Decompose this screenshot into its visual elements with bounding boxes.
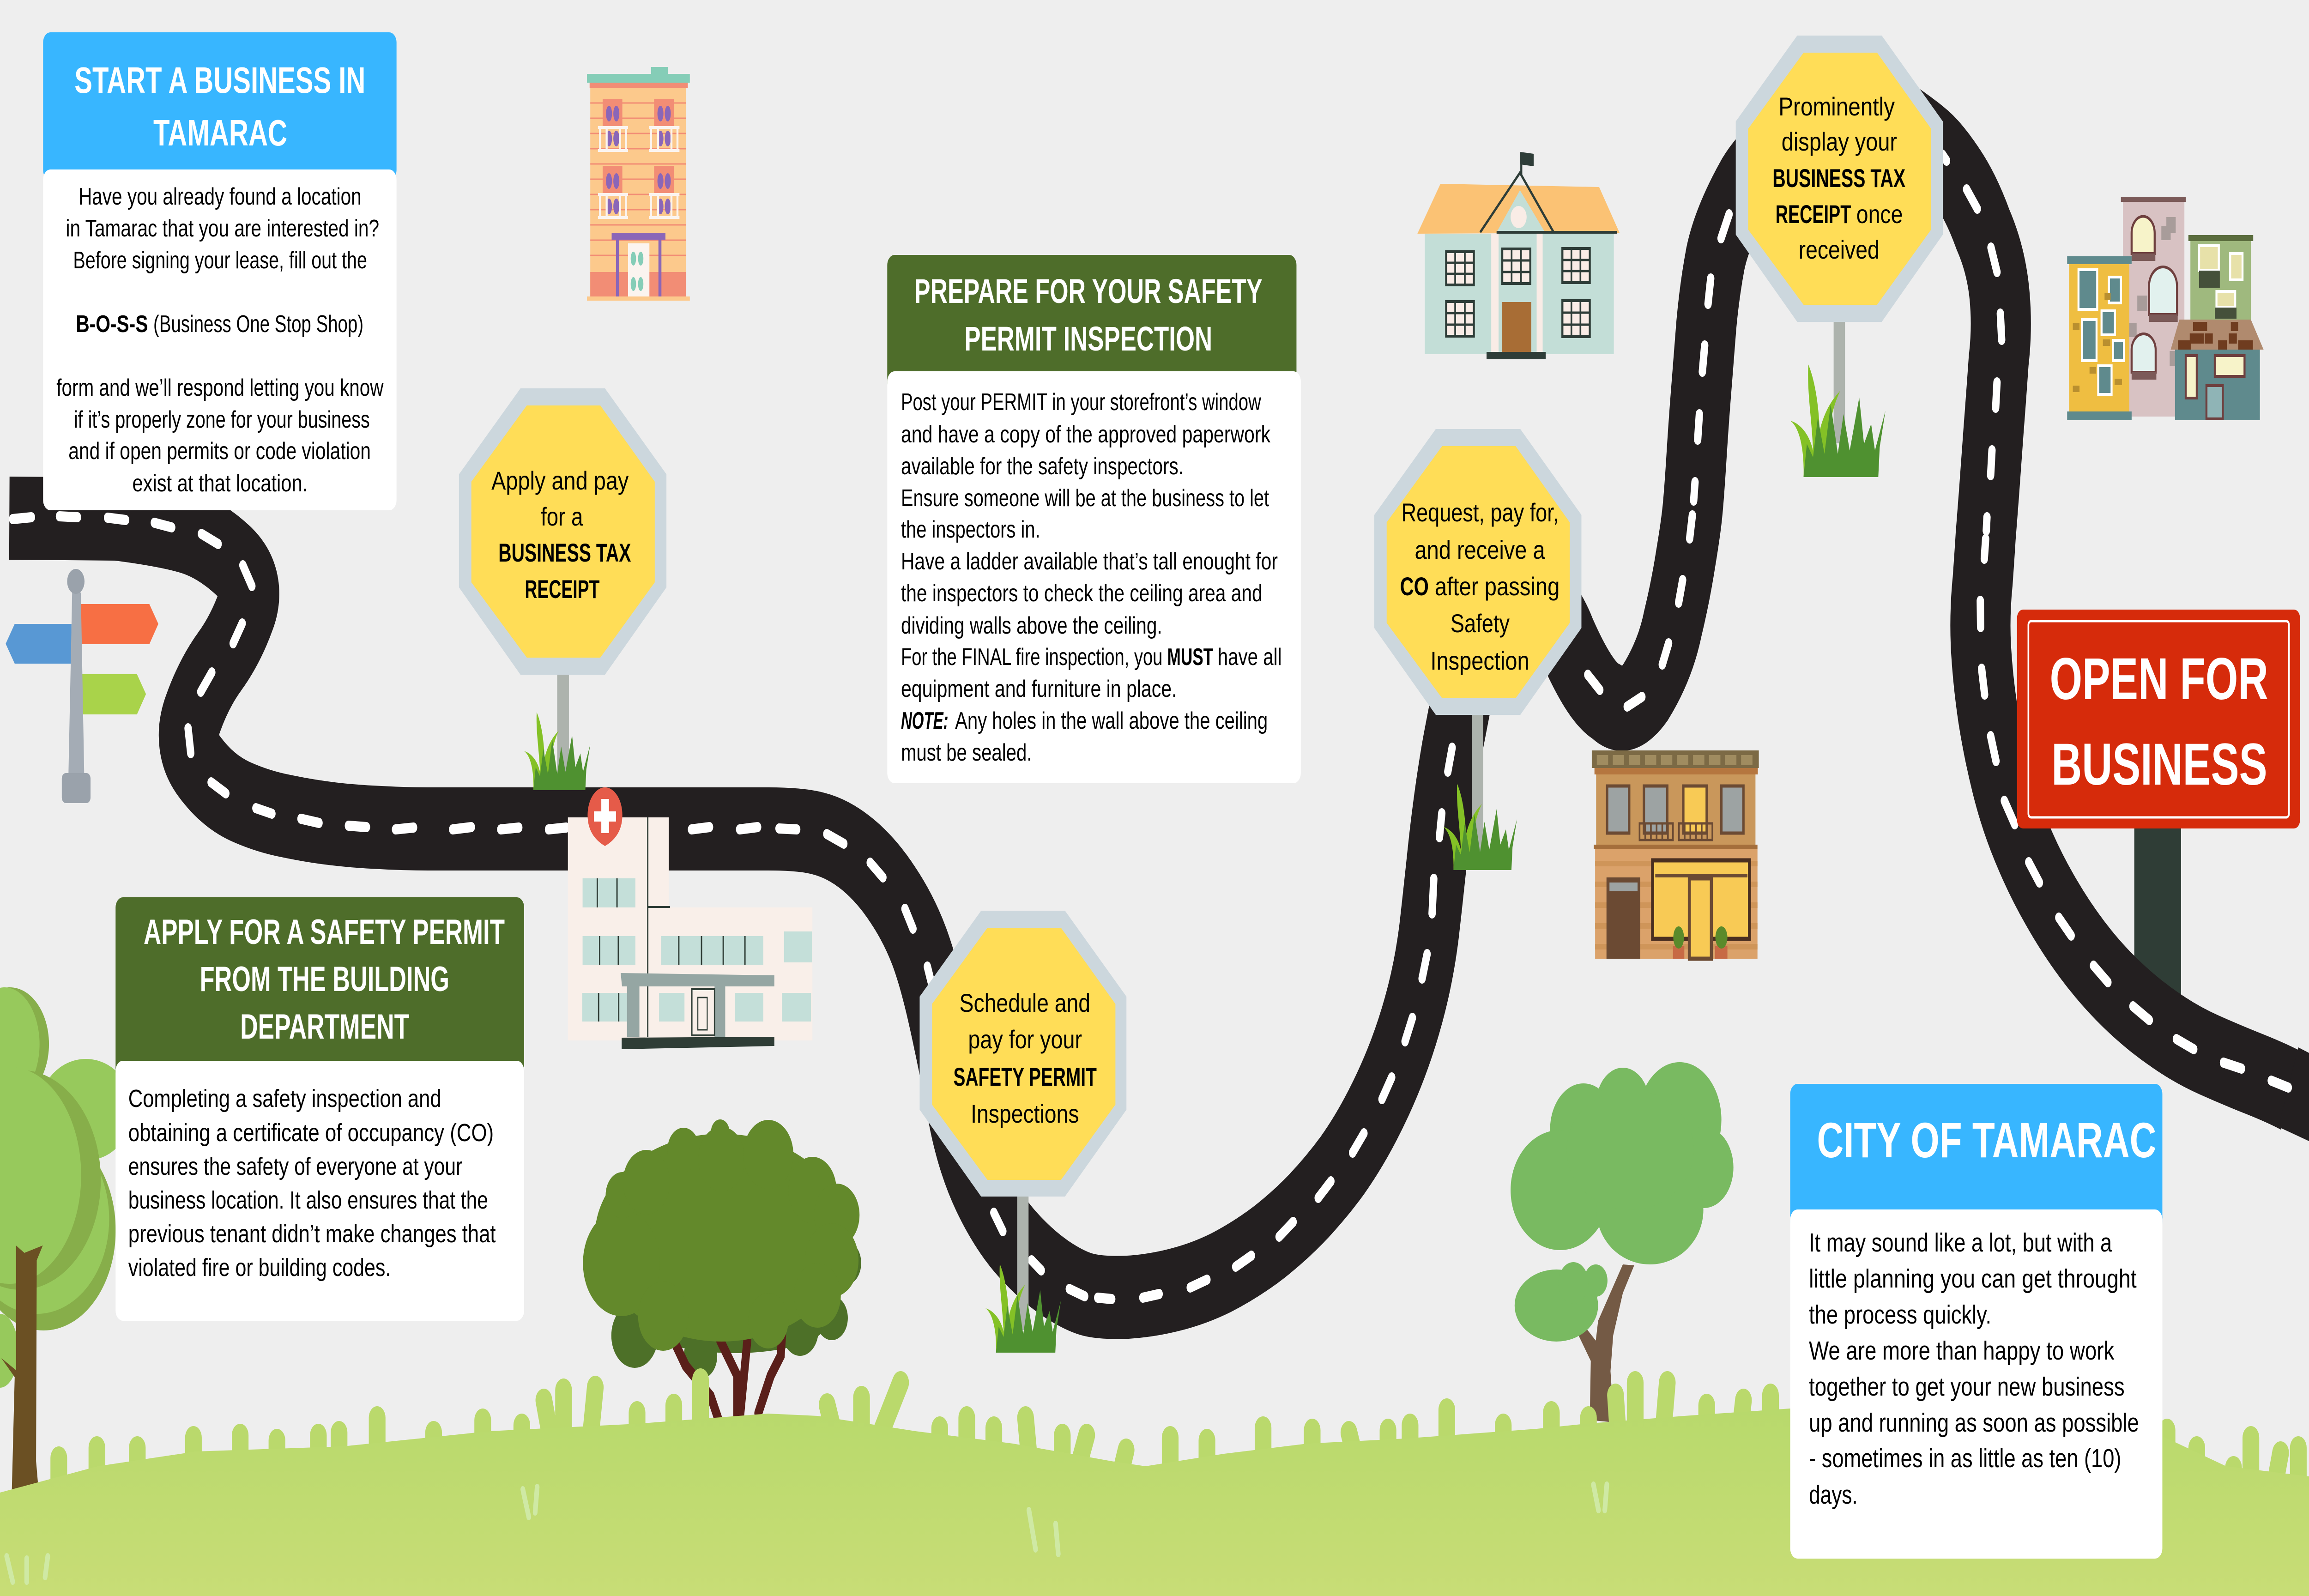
panel header: prepare for inspection — [887, 255, 1296, 393]
panel body: city of tamarac — [1790, 1209, 2162, 1559]
text: inspection checklist: MUST — [1167, 643, 1214, 670]
text: sign 2: pay for your — [968, 1026, 1082, 1054]
text: city of tamarac body: up and running as soon as possible — [1809, 1408, 2139, 1438]
text: sign 2: SAFETY PERMIT — [954, 1063, 1097, 1092]
panel: start a business — [43, 32, 397, 510]
text: sign 4: received — [1799, 236, 1880, 265]
text: inspection checklist: Ensure someone will be at the business to let — [901, 484, 1269, 511]
text: sign 2 — [954, 989, 1097, 1129]
tree: right — [1511, 1062, 1734, 1422]
text: start a business body: Have you already found a location — [79, 183, 362, 210]
building: apartment tower — [587, 67, 690, 301]
text: open for business — [2050, 646, 2268, 798]
building: school — [1417, 152, 1620, 359]
heading: apply for a safety permit: FROM THE BUILDING — [200, 960, 449, 999]
text: sign 4: display your — [1782, 128, 1897, 157]
text: sign 3: Safety — [1451, 610, 1510, 638]
text: safety permit body: ensures the safety of everyone at your — [128, 1152, 462, 1180]
text: sign 3: Request, pay for, — [1402, 499, 1559, 527]
text: safety permit body: Completing a safety inspection and — [128, 1084, 441, 1112]
text: safety permit body: violated fire or building codes. — [128, 1253, 391, 1281]
text: start a business body: (Business One Stop Shop) — [153, 310, 363, 337]
panel header: city of tamarac — [1790, 1084, 2162, 1232]
text: safety permit body: business location. It also ensures that the — [128, 1186, 488, 1214]
text: sign 1: BUSINESS TAX — [498, 539, 631, 568]
text: city of tamarac body: the process quickly. — [1809, 1300, 1991, 1330]
text: city of tamarac body — [1809, 1227, 2139, 1510]
text: sign 2: Schedule and — [960, 989, 1090, 1018]
text: city of tamarac body: - sometimes in as little as ten (10) — [1809, 1443, 2121, 1473]
heading: prepare for your safety permit inspection — [914, 272, 1263, 358]
text: sign 3: after passing — [1435, 573, 1559, 601]
text: inspection checklist: Have a ladder available that’s tall enought for — [901, 548, 1278, 574]
sign: business tax receipt — [459, 388, 666, 790]
heading: city of tamarac: CITY OF TAMARAC — [1817, 1112, 2156, 1168]
text: open for business: OPEN FOR — [2050, 646, 2268, 712]
building: colourful block — [2067, 197, 2264, 420]
sign: display business tax receipt — [1736, 36, 1943, 477]
text: sign 1 — [491, 467, 631, 604]
text: sign 3: Inspection — [1431, 647, 1529, 676]
text: inspection checklist: For the FINAL fire inspection, you — [901, 643, 1162, 670]
sign: open for business — [2017, 610, 2300, 828]
heading: apply for a safety permit: DEPARTMENT — [240, 1007, 409, 1046]
text: open for business: BUSINESS — [2051, 731, 2267, 798]
text: inspection checklist: Post your PERMIT in your storefront’s window — [901, 388, 1261, 415]
text: city of tamarac body: It may sound like a lot, but with a — [1809, 1227, 2112, 1257]
ground: grass hill — [0, 1380, 2309, 1596]
text: safety permit body: previous tenant didn’t make changes that — [128, 1220, 496, 1247]
text: city of tamarac body: little planning you can get throught — [1809, 1264, 2137, 1294]
open for business: sign post — [2134, 827, 2181, 998]
text: start a business body — [56, 183, 384, 496]
text: start a business body: form and we’ll respond letting you know — [56, 374, 384, 401]
panel body: prepare for inspection — [887, 371, 1301, 783]
heading: start a business in tamarac: TAMARAC — [153, 112, 287, 153]
text: sign 4 — [1772, 93, 1905, 265]
text: city of tamarac body: days. — [1809, 1480, 1858, 1510]
text: sign 4: BUSINESS TAX — [1772, 164, 1905, 193]
sign: safety permit inspections — [919, 911, 1126, 1353]
heading: start a business in tamarac: START A BUSINESS IN — [74, 60, 365, 101]
text: start a business body: Before signing your lease, fill out the — [73, 247, 367, 273]
text: sign 3: CO — [1400, 573, 1429, 601]
text: sign 3 — [1400, 499, 1559, 676]
text: start a business body: exist at that location. — [132, 470, 308, 496]
text: start a business body: and if open permits or code violation — [68, 437, 371, 464]
text: city of tamarac body: together to get your new business — [1809, 1372, 2125, 1402]
text: inspection checklist: NOTE: — [901, 707, 949, 734]
text: sign 1: RECEIPT — [525, 575, 600, 604]
text: inspection checklist: the inspectors in. — [901, 516, 1040, 543]
signpost: direction arrows — [6, 569, 158, 803]
text: sign 3: and receive a — [1415, 536, 1545, 565]
text: inspection checklist: the inspectors to check the ceiling area and — [901, 580, 1263, 606]
panel header: safety permit — [115, 897, 524, 1082]
icon: grass tuft — [1443, 784, 1517, 870]
panel body: start a business — [43, 169, 397, 510]
text: inspection checklist: Any holes in the wall above the ceiling — [955, 707, 1268, 734]
text: inspection checklist: available for the safety inspectors. — [901, 453, 1184, 479]
panel header: start a business — [43, 32, 397, 180]
text: sign 4: once — [1856, 200, 1903, 229]
text: start a business body: in Tamarac that you are interested in? — [66, 215, 379, 242]
panel body: safety permit — [115, 1061, 524, 1321]
text: inspection checklist: equipment and furniture in place. — [901, 675, 1177, 702]
text: sign 1: Apply and pay — [491, 467, 629, 496]
building: brown shop — [1592, 750, 1759, 959]
text: inspection checklist: must be sealed. — [901, 739, 1032, 766]
icon: grass tuft — [524, 712, 590, 790]
bush — [583, 1119, 861, 1418]
heading: prepare for your safety permit inspection: PREPARE FOR YOUR SAFETY — [914, 272, 1263, 310]
text: safety permit body: obtaining a certificate of occupancy (CO) — [128, 1118, 494, 1146]
panel: prepare for inspection — [887, 255, 1301, 783]
text: inspection checklist: dividing walls above the ceiling. — [901, 612, 1162, 639]
road — [9, 117, 2309, 1299]
heading: apply for a safety permit: APPLY FOR A SAFETY PERMIT — [144, 913, 505, 952]
panel: safety permit — [115, 897, 524, 1321]
text: city of tamarac body: We are more than happy to work — [1809, 1336, 2114, 1366]
text: sign 2: Inspections — [971, 1100, 1079, 1129]
icon: grass tuft — [1790, 364, 1886, 477]
text: sign 4: Prominently — [1778, 93, 1895, 121]
heading: prepare for your safety permit inspection: PERMIT INSPECTION — [964, 320, 1212, 358]
text: inspection checklist: and have a copy of the approved paperwork — [901, 421, 1270, 447]
heading: apply for a safety permit — [144, 913, 505, 1046]
text: start a business body: B-O-S-S — [76, 310, 148, 337]
icon: grass tuft — [985, 1264, 1061, 1353]
tree: left — [0, 987, 133, 1496]
text: inspection checklist: have all — [1218, 643, 1282, 670]
text: sign 1: for a — [541, 503, 583, 532]
text: start a business body: if it’s properly zone for your business — [74, 406, 370, 433]
text: inspection checklist — [901, 388, 1282, 766]
panel: city of tamarac — [1790, 1084, 2162, 1559]
sign: certificate of occupancy — [1374, 429, 1581, 870]
heading: start a business in tamarac — [74, 60, 365, 153]
text: sign 4: RECEIPT — [1776, 200, 1851, 229]
building: hospital — [568, 787, 812, 1049]
text: safety permit body — [128, 1084, 496, 1281]
